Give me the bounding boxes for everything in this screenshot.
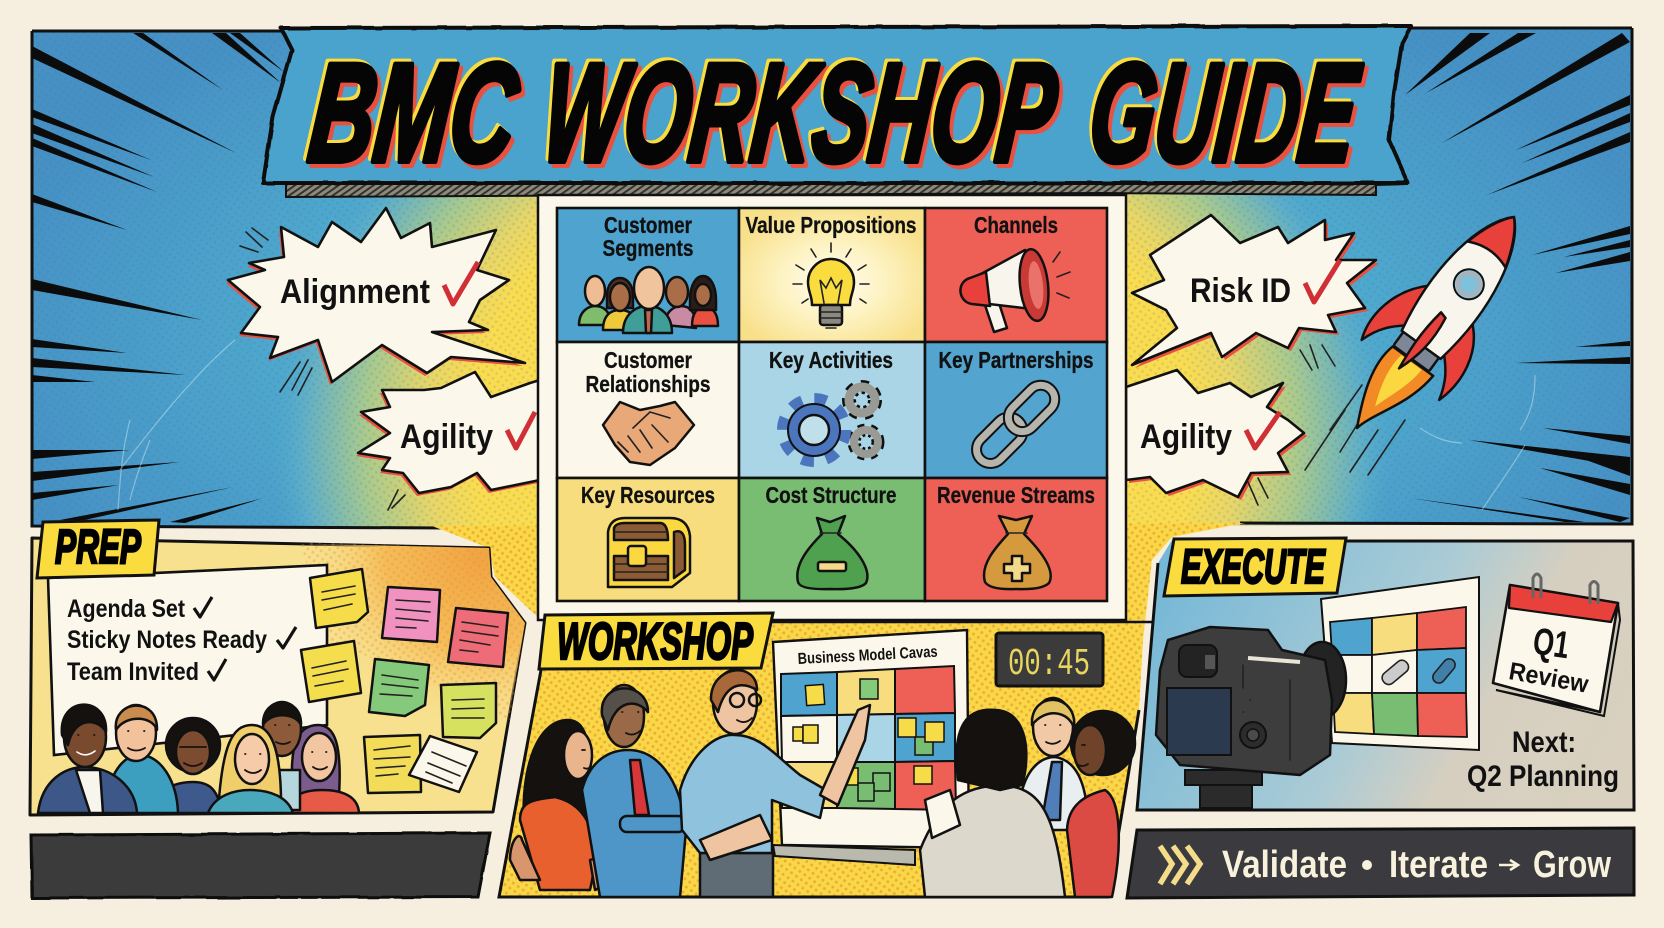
people in workshop (510, 670, 1135, 897)
cell: Revenue Streams (937, 482, 1095, 589)
person: purple hair woman (286, 725, 359, 813)
person: woman with afro (1067, 711, 1135, 897)
burst: Alignment (226, 208, 525, 395)
PREP label: PREP (55, 521, 142, 574)
panel: comic burst background (32, 28, 1632, 528)
cell: Value Propositions (746, 212, 916, 328)
title text: GUIDE (1087, 38, 1371, 195)
cell: Customer Relationships: Customer (604, 347, 692, 373)
cell: Customer Relationships (586, 347, 710, 465)
person: navy suit man (38, 705, 137, 813)
burst: Agility left (356, 372, 540, 510)
cell: Key Resources (581, 482, 715, 587)
footer bar: Validate Iterate Grow (1127, 828, 1634, 898)
person: man at back (263, 702, 301, 810)
calendar: Q1 Review: Review (1507, 657, 1591, 699)
whiteboard: Business Model Cavas (797, 644, 938, 668)
person: glasses woman (152, 718, 222, 813)
cell: Channels (960, 212, 1070, 332)
banner shape (263, 26, 1411, 183)
dark empty footer bar (31, 833, 490, 898)
title text: BMC (300, 31, 523, 188)
mini chain and bag icons (1380, 658, 1411, 687)
burst: Agility right: Agility (1140, 418, 1232, 456)
WORKSHOP label: WORKSHOP (557, 613, 753, 671)
next step text (1467, 726, 1619, 793)
cell: Channels: Channels (974, 212, 1058, 238)
title text: BMC (303, 34, 526, 191)
checklist text: Agenda Set (67, 595, 186, 623)
cell: Key Activities: Key Activities (769, 347, 893, 373)
person: presenter with glasses (680, 670, 870, 897)
canvas cells (557, 208, 1107, 601)
mini canvas grid (781, 666, 956, 810)
title text: WORKSHOP (534, 31, 1061, 188)
burst: Agility right (1126, 370, 1307, 505)
cell: Value Propositions: Value Propositions (746, 212, 916, 238)
calendar: Q1 Review (1493, 574, 1620, 716)
title text: WORKSHOP (541, 38, 1067, 195)
person: blue shirt man (105, 705, 178, 813)
panel: PREP (30, 520, 525, 815)
panel: WORKSHOP (499, 613, 1156, 897)
checklist text (67, 595, 296, 686)
camera on tripod (1156, 627, 1346, 808)
EXECUTE label (1164, 538, 1346, 596)
cell: Revenue Streams: Revenue Streams (937, 482, 1095, 508)
board with mini canvas (1321, 577, 1479, 750)
chalk scratches (118, 340, 1535, 510)
EXECUTE label: EXECUTE (1181, 541, 1326, 594)
panel: business model canvas (538, 195, 1126, 620)
checklist sheet (48, 565, 327, 755)
title banner (263, 26, 1411, 197)
burst: Alignment: Alignment (280, 273, 430, 311)
red check (1246, 412, 1280, 448)
burst: Risk ID (1132, 215, 1379, 370)
cell: Key Activities (769, 347, 893, 458)
action lines (32, 33, 1630, 523)
person: blond man behind (1020, 698, 1088, 830)
burst: Agility left: Agility (400, 418, 493, 456)
panel: yellow halftone spill behind workshop (432, 523, 1245, 897)
footer bar: Validate Iterate Grow: Grow (1533, 844, 1611, 886)
cell: Customer Segments: Customer (604, 212, 692, 238)
red check (1305, 260, 1340, 302)
panel: EXECUTE (1137, 538, 1634, 810)
cell: Customer Segments: Segments (602, 235, 694, 261)
red check (444, 262, 478, 304)
burst: Risk ID: Risk ID (1190, 272, 1291, 310)
digital timer: 00:45 (1008, 643, 1090, 686)
next step text: Q2 Planning (1467, 760, 1619, 793)
PREP label (37, 520, 159, 578)
chevrons (1160, 846, 1200, 884)
team of six people (38, 702, 359, 813)
cell: Cost Structure: Cost Structure (766, 482, 896, 508)
sticky notes (301, 569, 508, 793)
footer bar: Validate Iterate Grow: Validate (1222, 844, 1347, 886)
cell: Customer Segments (579, 212, 718, 333)
digital timer (996, 633, 1103, 686)
person: woman in orange (510, 720, 672, 890)
title text: GUIDE (1080, 31, 1364, 188)
title text: GUIDE (1083, 34, 1367, 191)
cell: Key Partnerships (938, 347, 1094, 469)
next step text: Next: (1512, 726, 1576, 759)
cell: Key Partnerships: Key Partnerships (938, 347, 1094, 373)
title text: BMC (307, 38, 530, 195)
icon: rocket (1305, 185, 1556, 475)
small sticky notes (793, 679, 944, 801)
WORKSHOP label (539, 613, 773, 671)
calendar: Q1 Review: Q1 (1530, 621, 1572, 667)
cell: Cost Structure (766, 482, 896, 589)
footer bar: Validate Iterate Grow: Iterate (1389, 844, 1488, 886)
person: blonde woman (208, 725, 293, 813)
title text: WORKSHOP (537, 34, 1064, 191)
checklist text: Sticky Notes Ready (67, 626, 267, 654)
person: man with red tie (582, 685, 686, 897)
red check (507, 412, 535, 448)
checklist text: Team Invited (67, 658, 199, 686)
banner shadow (286, 184, 1408, 197)
person: man from behind with notes (920, 710, 1065, 897)
cell: Key Resources: Key Resources (581, 482, 715, 508)
whiteboard (773, 630, 969, 865)
cell: Customer Relationships: Relationships (586, 371, 710, 397)
